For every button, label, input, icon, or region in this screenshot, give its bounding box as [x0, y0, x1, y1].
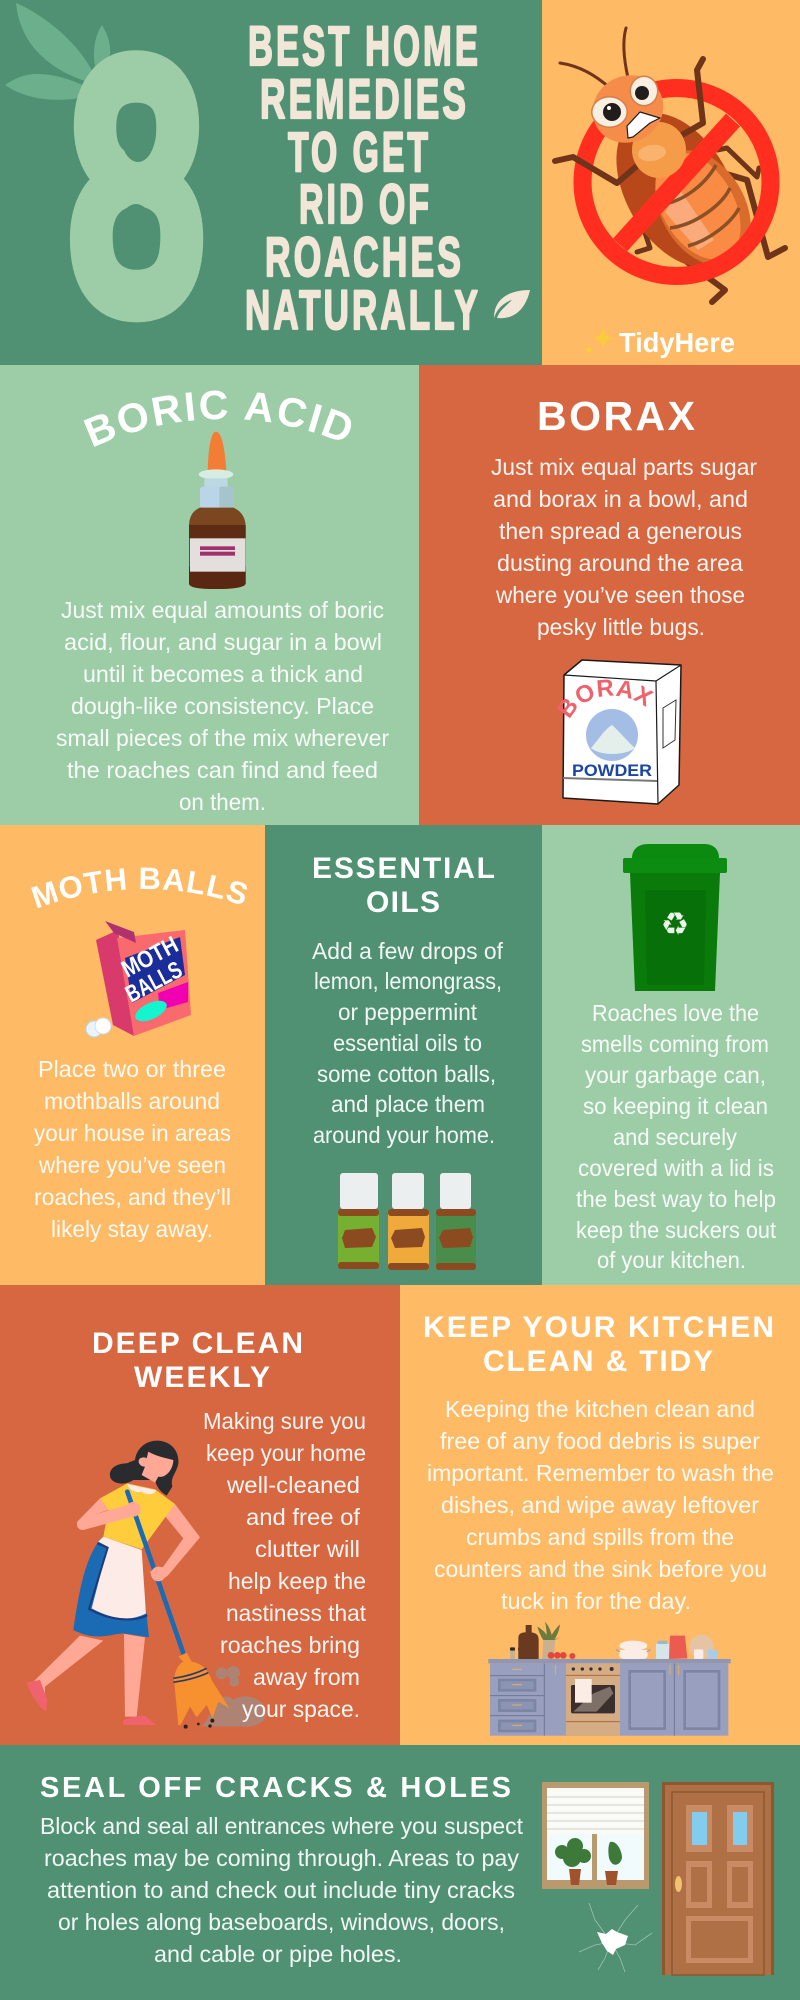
icon: small leaf [494, 290, 530, 318]
text: garbage can body: your garbage can, [585, 1062, 766, 1088]
text: kitchen body [427, 1396, 774, 1614]
logo: TidyHere: TidyHere [619, 327, 735, 358]
title text: REMEDIES [260, 67, 469, 130]
hands [126, 1502, 166, 1581]
icon: woman sweeping [27, 1441, 267, 1729]
text: boric acid body: until it becomes a thick and [83, 661, 363, 687]
heading: moth balls curved: MOTH BALLS [31, 868, 248, 908]
text: deep clean body: help keep the [228, 1568, 366, 1594]
text: moth balls body [34, 1056, 231, 1242]
shoes [27, 1680, 47, 1712]
text: garbage can body: smells coming from [581, 1031, 769, 1057]
text: deep clean body: well-cleaned [226, 1472, 360, 1498]
text: borax body: where you’ve seen those [495, 582, 745, 608]
title text: NATURALLY [245, 278, 481, 341]
icon: green bin: ♻ [661, 905, 689, 943]
text: deep clean body [203, 1408, 367, 1722]
big number 8: 8 [70, 0, 203, 377]
text: borax body [491, 454, 757, 640]
legs [30, 1636, 103, 1697]
title text: RID OF [299, 172, 432, 235]
text: garbage can body: of your kitchen. [597, 1247, 746, 1273]
panel: header title [0, 0, 542, 377]
title text [245, 14, 481, 341]
panel: roach illustration and logo [542, 0, 800, 365]
panel: essential oils [265, 825, 542, 1285]
text: moth balls body: where you’ve seen [38, 1152, 226, 1178]
heading: keep your kitchen clean and tidy [423, 1311, 774, 1378]
icon: moth balls box: BALLS [121, 956, 187, 1008]
text: seal off body: or holes along baseboards, windows, doors, [58, 1909, 505, 1935]
heading: essential oils [312, 852, 495, 919]
collar [127, 1484, 156, 1494]
left arm [77, 1498, 140, 1530]
right arm [150, 1504, 200, 1580]
text: garbage can body: the best way to help [576, 1186, 776, 1212]
text: boric acid body: dough-like consistency. Place [71, 693, 374, 719]
icon: wall crack hole [579, 1903, 652, 1972]
text: seal off body: attention to and check out include tiny cracks [47, 1877, 515, 1903]
text: seal off body: roaches may be coming through. Areas to pay [44, 1845, 519, 1871]
heading: essential oils: ESSENTIAL [312, 852, 495, 885]
text: garbage can body: Roaches love the [592, 1000, 759, 1026]
icon: oil bottles [338, 1173, 476, 1270]
text: borax body: dusting around the area [497, 550, 743, 576]
heading: deep clean weekly: WEEKLY [134, 1361, 270, 1394]
heading: essential oils: OILS [366, 886, 440, 919]
text: boric acid body: Just mix equal amounts of boric [61, 597, 384, 623]
broom handle [127, 1492, 183, 1653]
text: deep clean body: Making sure you [203, 1408, 366, 1434]
text: garbage can body [576, 1000, 777, 1273]
text: seal off body: and cable or pipe holes. [154, 1941, 402, 1967]
cabinets [490, 1663, 728, 1736]
icon: green bin [623, 844, 727, 991]
text: boric acid body: small pieces of the mix wherever [56, 725, 389, 751]
title text: ROACHES [265, 225, 464, 288]
text: deep clean body: nastiness that [226, 1600, 367, 1626]
heading: deep clean weekly: DEEP CLEAN [92, 1327, 303, 1360]
panel: keep your kitchen clean [400, 1285, 800, 1745]
text: seal off body: Block and seal all entrances where you suspect [40, 1813, 524, 1839]
icon: moth balls box [86, 921, 191, 1037]
text: deep clean body: your space. [242, 1696, 360, 1722]
panel: deep clean weekly [0, 1285, 400, 1745]
icon: borax box [556, 659, 682, 805]
text: deep clean body: keep your home [206, 1440, 366, 1466]
icon: background leaves [5, 3, 110, 100]
text: essential oils body: or peppermint [338, 999, 478, 1025]
broom head [174, 1653, 229, 1725]
text: deep clean body: and free of [246, 1504, 361, 1530]
counter items [510, 1622, 717, 1659]
text: kitchen body: important. Remember to wash the [427, 1460, 774, 1486]
text: kitchen body: Keeping the kitchen clean and [445, 1396, 755, 1422]
text: moth balls body: roaches, and they’ll [34, 1184, 231, 1210]
text: garbage can body: so keeping it clean [583, 1093, 768, 1119]
text: garbage can body: keep the suckers out [576, 1217, 777, 1243]
heading: keep your kitchen clean and tidy: CLEAN & TIDY [483, 1345, 713, 1378]
text: essential oils body: Add a few drops of [312, 938, 504, 964]
text: kitchen body: free of any food debris is super [440, 1428, 760, 1454]
text: boric acid body [56, 597, 389, 815]
text: essential oils body: and place them [331, 1091, 485, 1117]
text: deep clean body: clutter will [255, 1536, 360, 1562]
icon: sparkle logo mark [584, 328, 613, 354]
panel: borax [419, 365, 800, 825]
text: kitchen body: counters and the sink before you [434, 1556, 767, 1582]
text: borax body: Just mix equal parts sugar [491, 454, 757, 480]
text: boric acid body: on them. [179, 789, 266, 815]
icon: moth balls box: MOTH [117, 931, 183, 983]
text: moth balls body: likely stay away. [51, 1216, 213, 1242]
title text: TO GET [288, 120, 431, 183]
heading: borax: BORAX [537, 393, 695, 439]
icon: borax box: POWDER [572, 761, 652, 780]
text: borax body: then spread a generous [499, 518, 742, 544]
face [139, 1452, 173, 1483]
text: essential oils body: lemon, lemongrass, [314, 968, 502, 994]
skirt [73, 1542, 149, 1637]
title text: BEST HOME [248, 14, 481, 77]
text: boric acid body: the roaches can find and feed [67, 757, 378, 783]
text: essential oils body: essential oils to [333, 1030, 482, 1056]
text: moth balls body: Place two or three [38, 1056, 226, 1082]
panel: seal off cracks and holes [0, 1745, 800, 2000]
text: deep clean body: away from [253, 1664, 360, 1690]
text: essential oils body: some cotton balls, [317, 1061, 496, 1087]
hair [110, 1441, 178, 1496]
text: kitchen body: dishes, and wipe away leftover [441, 1492, 759, 1518]
text: kitchen body: crumbs and spills from the [466, 1524, 734, 1550]
dirt piles [200, 1666, 267, 1727]
icon: window with plants [542, 1782, 649, 1889]
icon: kitchen counter [488, 1622, 731, 1736]
shirt [100, 1483, 175, 1549]
icon: wooden door [662, 1782, 774, 1975]
text: kitchen body: tuck in for the day. [501, 1588, 691, 1614]
text: boric acid body: acid, flour, and sugar in a bowl [64, 629, 382, 655]
icon: crossed-out roach [555, 28, 785, 302]
panel: moth balls [0, 825, 265, 1285]
text: essential oils body: around your home. [313, 1122, 495, 1148]
icon: boric acid bottle [189, 432, 246, 589]
heading: deep clean weekly [92, 1327, 303, 1394]
text: seal off body [40, 1813, 524, 1967]
text: deep clean body: roaches bring [220, 1632, 360, 1658]
text: borax body: pesky little bugs. [537, 614, 705, 640]
text: moth balls body: your house in areas [34, 1120, 231, 1146]
heading: boric acid curved: BORIC ACID [84, 390, 352, 447]
apron [92, 1537, 146, 1618]
text: essential oils body [312, 938, 504, 1148]
icon: borax box: BORAX [556, 680, 654, 718]
text: borax body: and borax in a bowl, and [493, 486, 748, 512]
oven [566, 1663, 620, 1736]
panel: garbage can [542, 825, 800, 1285]
text: garbage can body: covered with a lid is [578, 1155, 774, 1181]
heading: keep your kitchen clean and tidy: KEEP YOUR KITCHEN [423, 1311, 774, 1344]
text: garbage can body: and securely [613, 1124, 737, 1150]
text: moth balls body: mothballs around [44, 1088, 220, 1114]
panel: boric acid [0, 365, 419, 825]
heading: seal off cracks: SEAL OFF CRACKS & HOLES [40, 1772, 511, 1804]
